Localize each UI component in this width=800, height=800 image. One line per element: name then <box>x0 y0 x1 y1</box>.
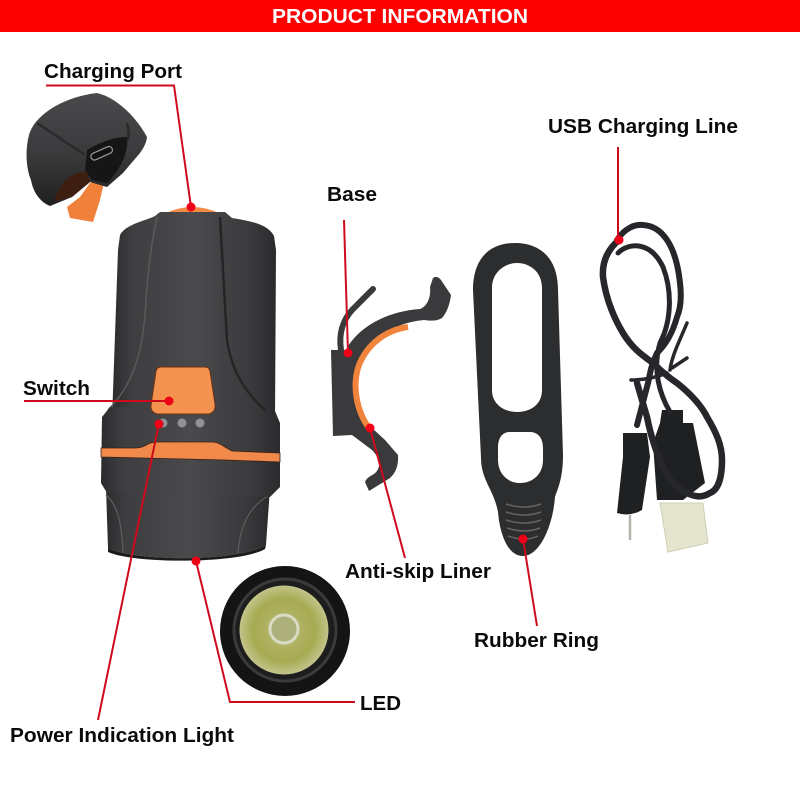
title banner: PRODUCT INFORMATION <box>272 6 528 28</box>
icon: rubber ring <box>473 243 563 556</box>
title banner <box>0 0 800 32</box>
charging port cover <box>166 207 219 213</box>
icon: base clamp <box>331 277 451 491</box>
icon: charging port close-up <box>27 93 147 222</box>
label: USB Charging Line: USB Charging Line <box>548 116 738 138</box>
cable loops <box>603 225 722 496</box>
anti-skip liner <box>356 327 408 428</box>
label: LED: LED <box>360 693 401 715</box>
USB plug <box>660 503 708 552</box>
label: Rubber Ring: Rubber Ring <box>474 630 599 652</box>
ring bulge <box>101 407 280 497</box>
label: Power Indication Light: Power Indication Light <box>10 725 234 747</box>
upper body <box>112 212 276 420</box>
label: Switch: Switch <box>23 378 90 400</box>
icon: USB charging line <box>603 225 722 552</box>
label: Base: Base <box>327 184 377 206</box>
power indicator lights <box>158 418 204 428</box>
switch button <box>151 367 215 414</box>
orange band <box>101 442 280 462</box>
label: Charging Port: Charging Port <box>44 61 182 83</box>
panel: flashlight body <box>101 207 280 561</box>
icon: LED lens <box>220 566 350 696</box>
callout dots <box>154 202 624 566</box>
micro connector <box>629 515 631 540</box>
label: Anti-skip Liner: Anti-skip Liner <box>345 561 491 583</box>
lower section <box>106 488 270 558</box>
callout lines <box>24 86 618 720</box>
